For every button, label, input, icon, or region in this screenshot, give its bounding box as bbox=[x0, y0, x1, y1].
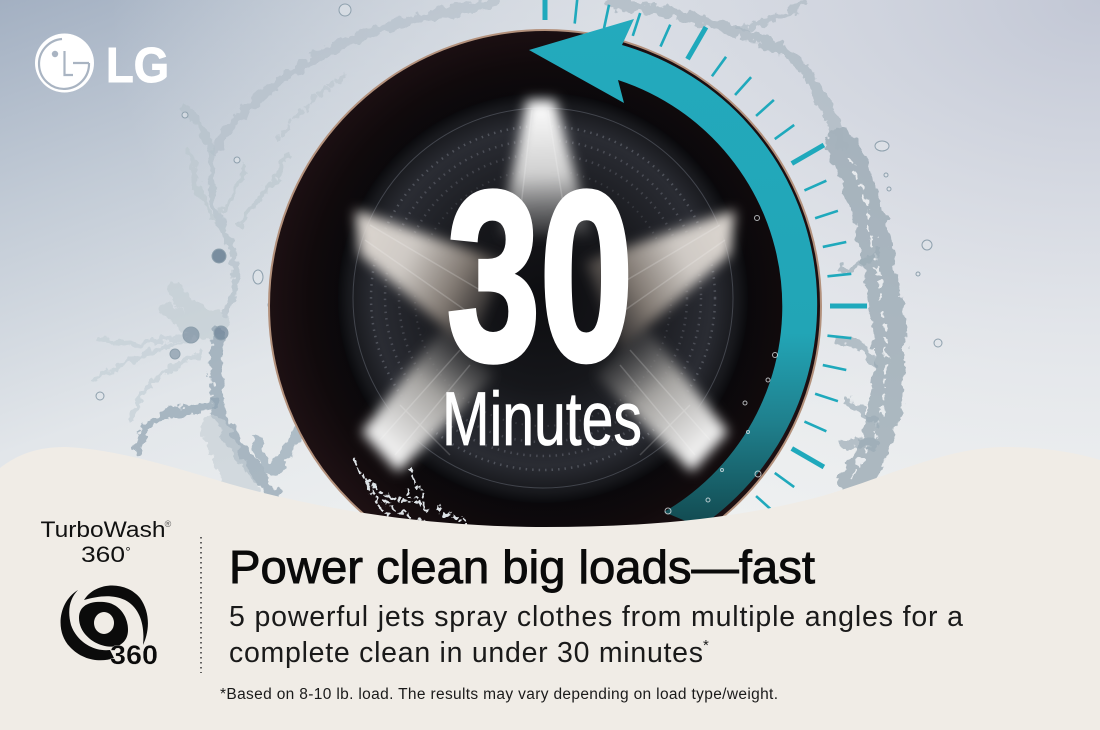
water splash swirl bbox=[97, 2, 891, 495]
LG logo bbox=[35, 34, 169, 93]
water droplets bbox=[96, 4, 942, 435]
logo wordmark: LG bbox=[106, 39, 169, 93]
jet streaks bbox=[365, 110, 725, 455]
label Minutes: Minutes bbox=[442, 377, 642, 462]
product name bbox=[40, 517, 172, 567]
bubbles on arrow bbox=[665, 216, 778, 514]
heading: Power clean big loads—fast bbox=[229, 541, 815, 593]
product name: ® bbox=[165, 519, 172, 529]
icon: TurboWash 360 swirl: 360 bbox=[110, 640, 158, 670]
water jets star bbox=[355, 100, 735, 472]
water splash inside drum bbox=[355, 458, 470, 525]
description text bbox=[229, 601, 963, 669]
icon: TurboWash 360 swirl bbox=[61, 585, 158, 670]
product name: ° bbox=[125, 544, 131, 559]
product name: TurboWash bbox=[40, 517, 166, 542]
description text: 5 powerful jets spray clothes from multiple angles for a bbox=[229, 601, 963, 633]
headline number 30: 30 bbox=[447, 142, 633, 410]
teal progress arrow bbox=[529, 19, 817, 527]
timer tick marks bbox=[545, 0, 867, 512]
description text: * bbox=[703, 637, 709, 654]
description text: complete clean in under 30 minutes bbox=[229, 637, 703, 669]
footnote: *Based on 8-10 lb. load. The results may vary depending on load type/weight. bbox=[220, 686, 778, 703]
washer drum bbox=[269, 30, 821, 582]
cream bottom panel bbox=[0, 447, 1100, 730]
logo circle bbox=[35, 34, 94, 92]
inner tub bbox=[338, 93, 748, 503]
product name: 360 bbox=[81, 542, 125, 567]
